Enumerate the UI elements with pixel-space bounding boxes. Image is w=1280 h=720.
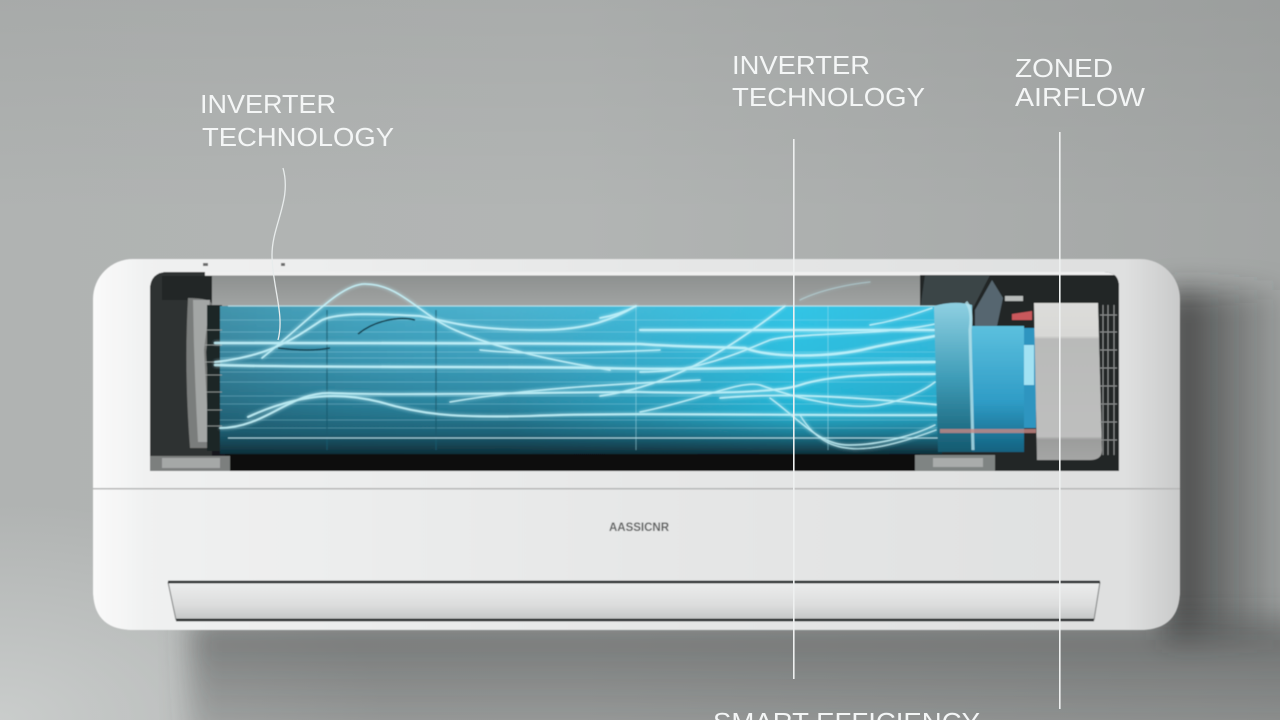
label: inverter technology left: TECHNOLOGY [202,122,394,152]
right blue rotor [915,302,1117,471]
label: inverter technology left: INVERTER [200,89,336,119]
brand label: AASSICNR [609,522,670,534]
label: zoned airflow: AIRFLOW [1015,82,1145,112]
callout curve left [272,168,285,340]
left end cap [150,272,230,471]
label: inverter technology right: INVERTER [732,50,870,80]
callout line right [1059,132,1061,709]
cooling coil cylinder [220,306,942,454]
cutaway window [150,272,1125,471]
callout line centre [793,139,795,679]
label: inverter technology right: TECHNOLOGY [732,82,925,112]
front panel [93,488,1180,630]
label: inverter technology right [732,50,925,112]
mesh grid [1100,305,1117,455]
unit body [93,259,1180,630]
unit shadow [190,290,1280,720]
label: inverter technology left [200,89,394,152]
upper grey interior [205,275,925,309]
top edge lines [228,306,940,438]
dark wisp [278,319,415,350]
label: zoned airflow: ZONED [1015,53,1113,83]
grey box [1034,303,1102,460]
air conditioner unit [93,259,1180,630]
fan fins [205,330,222,426]
label: zoned airflow [1015,53,1145,112]
top screws [203,263,285,266]
bottom dark strip [225,454,920,470]
air vent [168,582,1100,620]
right mechanism [920,275,1119,471]
air flow lines [215,282,940,449]
